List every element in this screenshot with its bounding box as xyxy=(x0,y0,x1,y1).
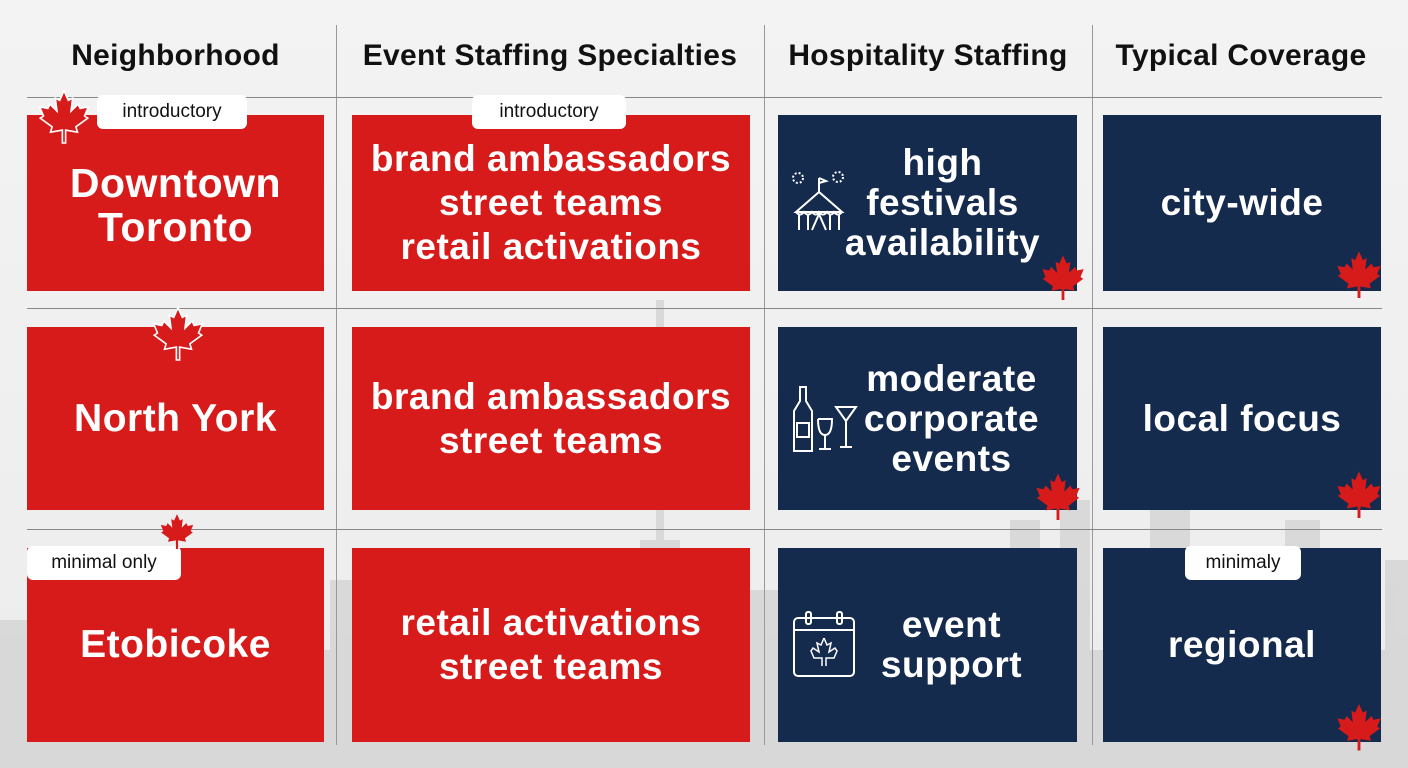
cell: high festivals availability: availability xyxy=(845,222,1040,263)
badge: minimaly xyxy=(1185,546,1301,580)
cell: event support: event xyxy=(902,604,1001,645)
cell: Etobicoke xyxy=(27,548,324,742)
grid lines xyxy=(336,25,337,745)
header: Neighborhood: Neighborhood xyxy=(71,39,280,72)
icon: calendar with maple leaf xyxy=(793,611,855,677)
header: Event Staffing Specialties: Event Staffing Specialties xyxy=(363,39,737,72)
badge: introductory 1 xyxy=(97,95,247,129)
header: Typical Coverage: Typical Coverage xyxy=(1115,39,1366,72)
cell: row2 specialties: brand ambassadors xyxy=(371,376,731,416)
badge: minimal only xyxy=(27,546,181,580)
badge: introductory 2: introductory xyxy=(499,101,599,122)
cell: moderate corporate events: corporate xyxy=(864,398,1039,438)
cell: row1 specialties: retail activations xyxy=(400,226,702,267)
icon: maple leaf r1c1 xyxy=(38,90,90,144)
cell: row1 specialties xyxy=(352,115,750,291)
icon: maple leaf r1c4 xyxy=(1338,252,1380,298)
cell: high festivals availability: festivals xyxy=(866,182,1019,223)
icon: maple leaf r2c3 xyxy=(1036,474,1080,520)
cell: city-wide: city-wide xyxy=(1161,182,1323,223)
cell: moderate corporate events: moderate xyxy=(866,358,1037,398)
cell: moderate corporate events: events xyxy=(891,438,1012,478)
cell: North York: North York xyxy=(74,396,277,440)
cell: North York xyxy=(27,327,324,510)
icon: tent xyxy=(792,171,845,230)
cell: row1 specialties: street teams xyxy=(439,182,663,223)
cell: row2 specialties xyxy=(352,327,750,510)
icon: maple leaf r3c1 xyxy=(160,514,194,549)
cell: high festivals availability: high xyxy=(902,142,983,183)
skyline background xyxy=(0,300,1408,768)
icon: maple leaf r2c4 xyxy=(1338,472,1380,518)
header: Hospitality Staffing: Hospitality Staffing xyxy=(788,39,1068,72)
badge: introductory 2 xyxy=(472,95,626,129)
cell: Downtown Toronto: Downtown xyxy=(70,160,281,206)
cell: row3 specialties xyxy=(352,548,750,742)
cell: moderate corporate events xyxy=(778,327,1077,510)
cell: city-wide xyxy=(1103,115,1381,291)
cell: row3 specialties: retail activations xyxy=(400,602,702,643)
cell: local focus: local focus xyxy=(1143,398,1341,438)
cell: event support: support xyxy=(881,644,1022,685)
cell: event support xyxy=(778,548,1077,742)
cell: row2 specialties: street teams xyxy=(439,420,663,460)
cell: regional xyxy=(1103,548,1381,742)
badge: minimal only: minimal only xyxy=(51,552,157,573)
cell: regional: regional xyxy=(1168,624,1316,665)
icon: maple leaf r3c4 xyxy=(1338,704,1380,750)
icon: maple leaf r1c3 xyxy=(1042,256,1084,300)
cell: Downtown Toronto xyxy=(27,115,324,291)
cell: Downtown Toronto: Toronto xyxy=(98,204,253,250)
badge: minimaly: minimaly xyxy=(1206,552,1280,573)
badge: introductory 1: introductory xyxy=(122,101,222,122)
cell: row1 specialties: brand ambassadors xyxy=(371,138,731,179)
cell: local focus xyxy=(1103,327,1381,510)
cell: row3 specialties: street teams xyxy=(439,646,663,687)
icon: bottle and glasses xyxy=(793,386,858,452)
cell: high festivals availability xyxy=(778,115,1077,291)
icon: maple leaf r2c1 xyxy=(152,306,204,361)
cell: Etobicoke: Etobicoke xyxy=(80,623,271,666)
